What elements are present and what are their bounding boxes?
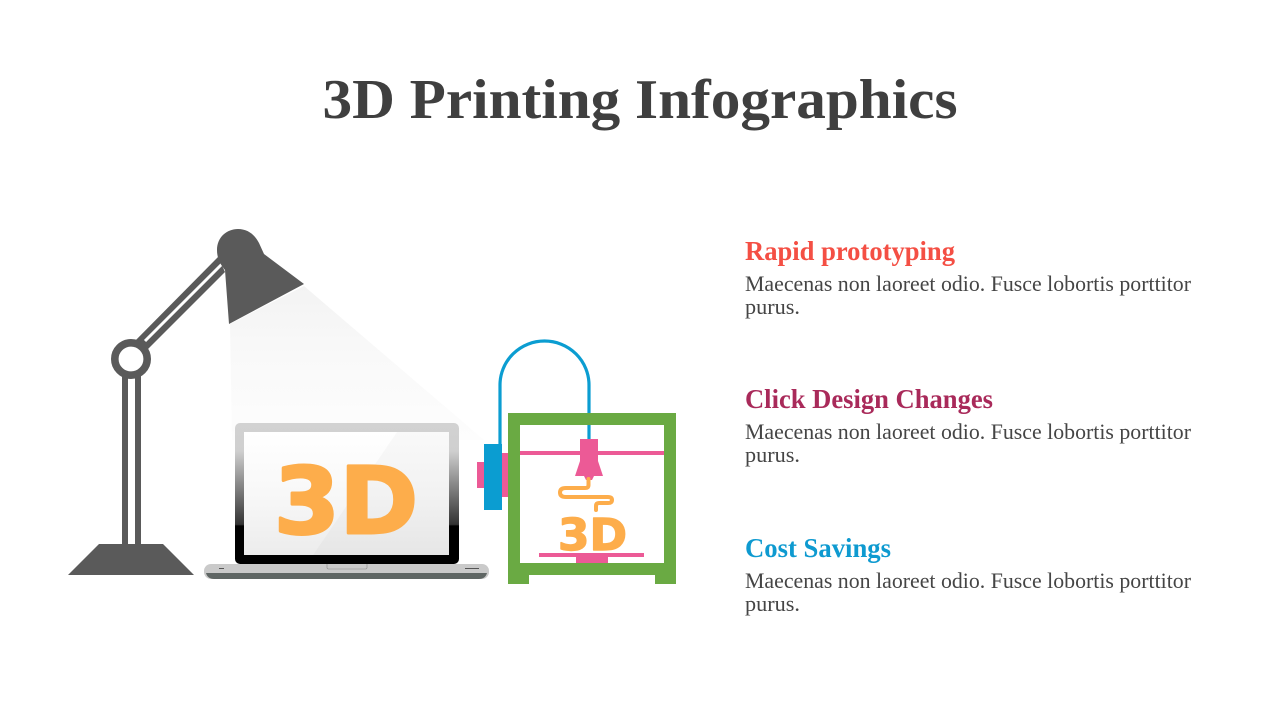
laptop bezel: [235, 423, 459, 564]
body: purus.: [745, 591, 800, 616]
title: 3D Printing Infographics: [322, 69, 958, 131]
icon: laptop: [204, 423, 489, 579]
lamp base: [68, 544, 194, 575]
extruder head: [575, 439, 603, 480]
icon: 3D printer: [477, 341, 676, 584]
printed 3D label: 3D: [558, 510, 627, 561]
text block: rapid prototyping: [745, 236, 1192, 319]
heading: Click Design Changes: [745, 384, 993, 414]
light beam: [230, 286, 484, 440]
lamp shade: [217, 229, 304, 324]
lamp joint: [115, 343, 147, 375]
body: Maecenas non laoreet odio. Fusce lobortis porttitor: [745, 419, 1192, 444]
icon: desk lamp: [68, 229, 304, 575]
filament spool: [484, 444, 502, 510]
print bed: [539, 553, 644, 563]
laptop 3D label: 3D: [274, 448, 418, 555]
spool hub: [477, 453, 508, 497]
printer frame: [508, 413, 676, 584]
body: Maecenas non laoreet odio. Fusce lobortis porttitor: [745, 271, 1192, 296]
text block: cost savings: [745, 533, 1192, 616]
filament cable: [500, 341, 589, 446]
laptop keyboard base: [204, 564, 489, 579]
heading: Rapid prototyping: [745, 236, 955, 266]
screen glare: [313, 432, 449, 555]
heading: Cost Savings: [745, 533, 891, 563]
laptop screen: [244, 432, 449, 555]
lamp post: [122, 376, 141, 545]
extruded filament: [560, 479, 612, 510]
lamp arm: [129, 257, 225, 351]
body: purus.: [745, 442, 800, 467]
print rail: [520, 451, 664, 455]
text block: click design changes: [745, 384, 1192, 467]
body: Maecenas non laoreet odio. Fusce lobortis porttitor: [745, 568, 1192, 593]
body: purus.: [745, 294, 800, 319]
